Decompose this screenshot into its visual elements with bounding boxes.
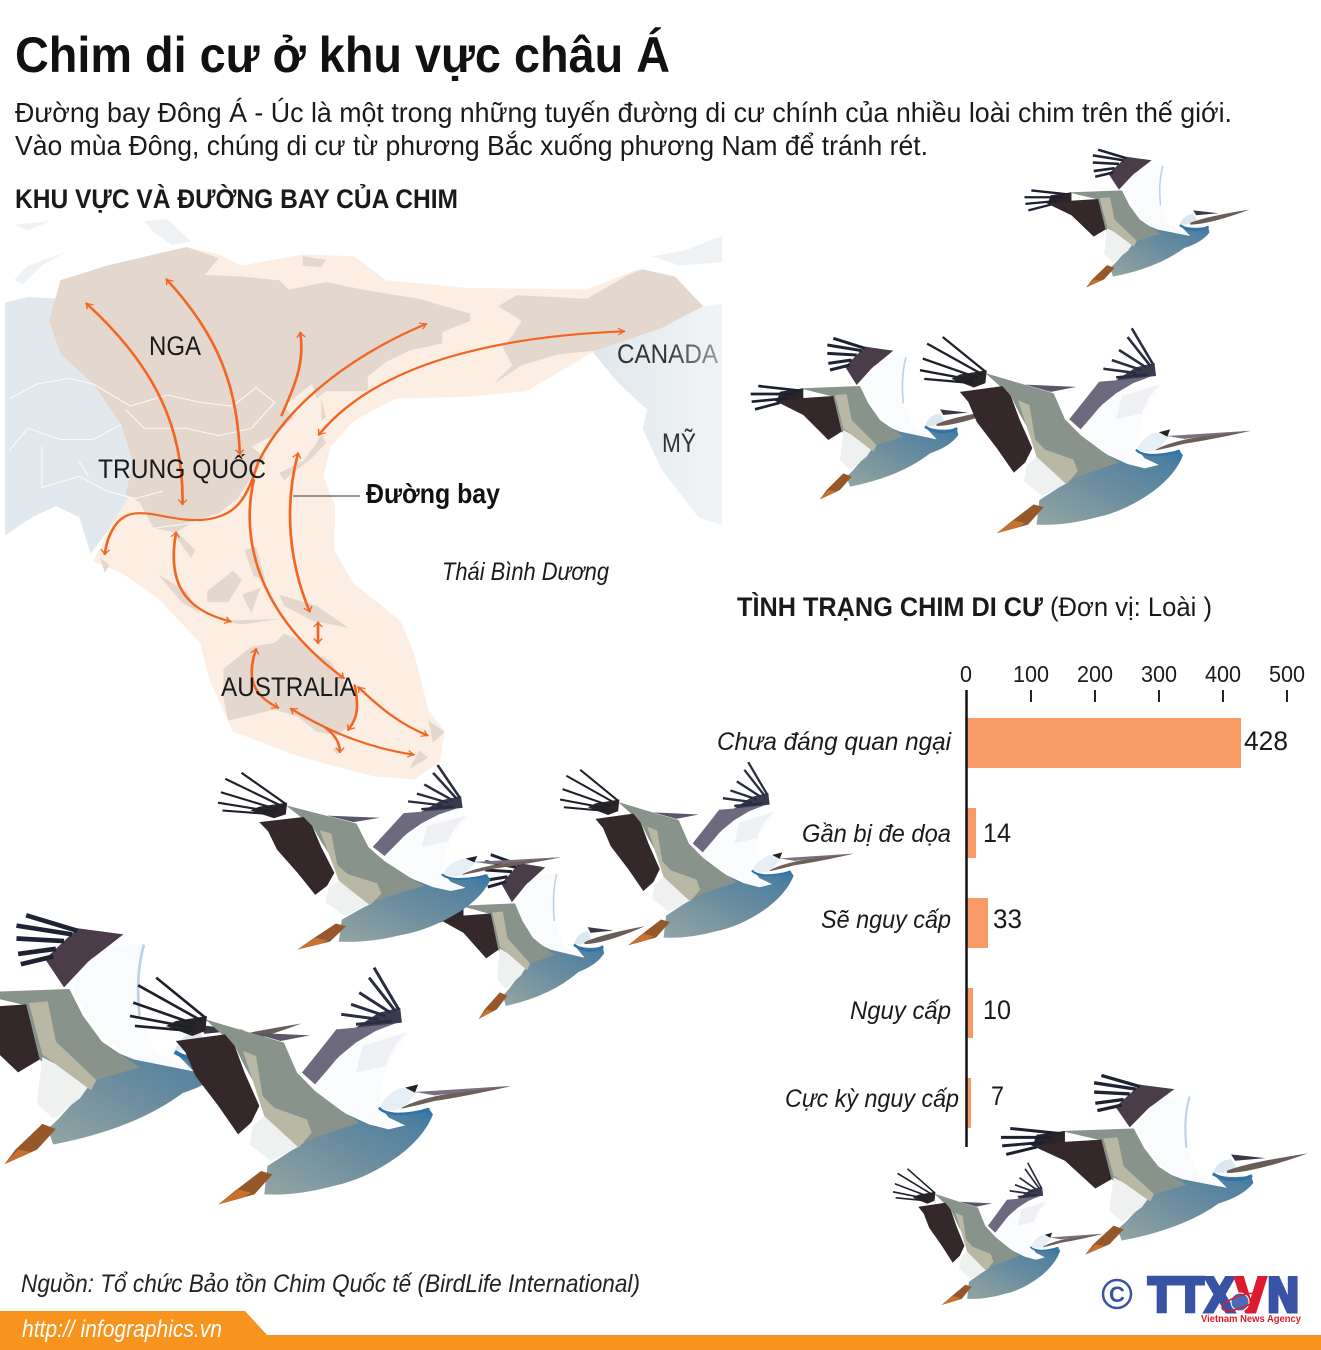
chart axis labels: 200: [1077, 661, 1113, 687]
icon: pelican lower left: [130, 968, 512, 1204]
logo: TTXVN: TTXVN: [1148, 1269, 1300, 1324]
icon: pelican center right: [560, 762, 854, 945]
icon: pelican pair left: [751, 338, 1003, 499]
icon: pelican center left: [218, 765, 561, 949]
map labels: NGA: [149, 331, 201, 361]
logo: TTXVN: Vietnam News Agency: [1201, 1314, 1301, 1325]
bar values: [983, 726, 1288, 1111]
bar values: 33: [993, 904, 1022, 934]
bar values: 7: [991, 1081, 1004, 1111]
map labels: CANADA: [617, 339, 718, 369]
map: flyway range: [93, 247, 641, 780]
icon: pelican far left: [0, 915, 302, 1164]
footer band: http:// infographics.vn: [22, 1316, 222, 1343]
panel: flyway map: [5, 219, 730, 780]
icon: pelican pair right: [920, 328, 1251, 533]
chart title: (Đơn vị: Loài ): [1050, 592, 1212, 622]
icon: pelican top: [1025, 150, 1250, 287]
footer band: [0, 1311, 1321, 1350]
category labels: Gần bị đe dọa: [802, 820, 951, 848]
chart axis labels: 0: [960, 661, 972, 687]
category labels: Sẽ nguy cấp: [821, 906, 951, 934]
map: Asia land outside flyway: [5, 297, 133, 554]
map: country borders: [9, 378, 275, 528]
source note: Nguồn: Tổ chức Bảo tồn Chim Quốc tế (BirdLife International): [21, 1270, 640, 1298]
chart axis labels: 300: [1141, 661, 1177, 687]
map labels: MỸ: [662, 427, 696, 458]
intro text: Vào mùa Đông, chúng di cư từ phương Bắc xuống phương Nam để tránh rét.: [15, 130, 928, 161]
intro text: [15, 97, 1232, 161]
callout: flyway label: Đường bay: [366, 478, 500, 509]
map: land within range: [49, 247, 703, 769]
bar values: 428: [1244, 726, 1288, 756]
map: North America: [591, 302, 730, 528]
chart axis labels: 400: [1205, 661, 1241, 687]
arrows: migration routes: [87, 280, 624, 755]
chart title: TÌNH TRẠNG CHIM DI CƯ: [737, 591, 1044, 622]
map: arctic islands: [14, 219, 726, 284]
icon: pelican bottom right: [1001, 1075, 1308, 1255]
chart axis labels: 500: [1269, 661, 1305, 687]
category labels: Cực kỳ nguy cấp: [785, 1085, 959, 1113]
map labels: AUSTRALIA: [221, 672, 356, 702]
icon: pelican bottom small: [893, 1163, 1104, 1305]
chart axis labels: [960, 661, 1305, 687]
category labels: Chưa đáng quan ngại: [717, 728, 952, 756]
heading: flyway map: KHU VỰC VÀ ĐƯỜNG BAY CỦA CHIM: [15, 182, 458, 214]
bar values: 10: [983, 995, 1011, 1025]
bar chart: migratory bird status: [717, 661, 1305, 1147]
title: Chim di cư ở khu vực châu Á: [15, 27, 670, 83]
chart title: [737, 591, 1212, 622]
bar values: 14: [983, 818, 1011, 848]
category labels: Nguy cấp: [850, 997, 951, 1025]
icon: pelican center back: [416, 855, 645, 1019]
chart axis labels: 100: [1013, 661, 1049, 687]
label: Pacific Ocean: Thái Bình Dương: [442, 558, 609, 586]
logo: TTXVN: C: [1109, 1282, 1125, 1307]
category labels: [717, 728, 959, 1113]
map labels: [98, 331, 718, 702]
intro text: Đường bay Đông Á - Úc là một trong những tuyến đường di cư chính của nhiều loài chim trên thế giới.: [15, 97, 1232, 128]
bars: [967, 718, 1241, 1128]
map labels: TRUNG QUỐC: [98, 452, 266, 484]
